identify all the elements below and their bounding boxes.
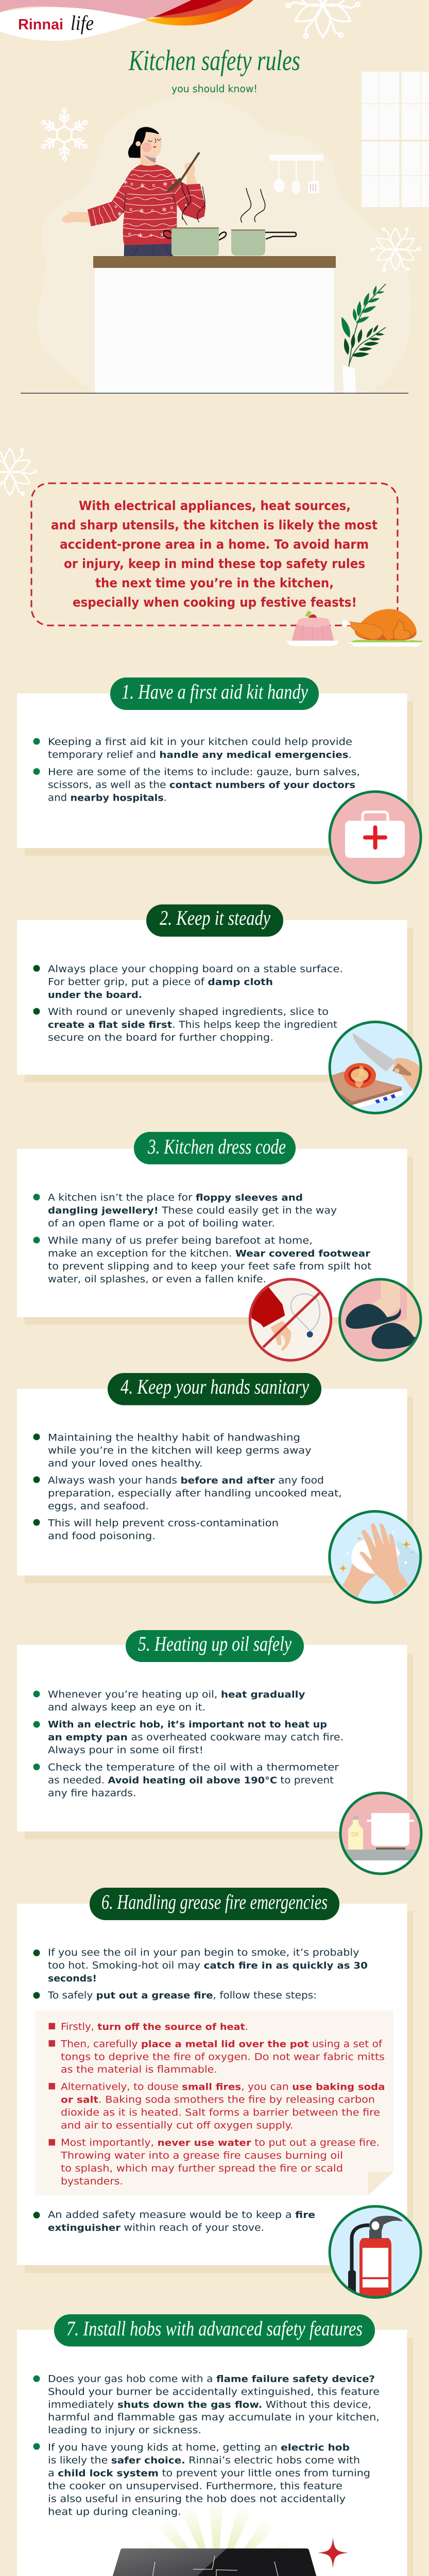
body text: and always keep an eye on it. (48, 1702, 205, 1713)
light leaves (339, 285, 385, 339)
intro text: accident-prone area in a home. To avoid harm (60, 537, 369, 552)
heading pill: 5. Heating up oil safely (138, 1632, 291, 1655)
steam from large pot (182, 183, 205, 225)
burner marks (121, 2556, 309, 2576)
body text (48, 964, 343, 1043)
body text: If you see the oil in your pan begin to smoke, it’s probably (48, 1947, 359, 1958)
body text: is also useful in ensuring the hob does not accidentally (48, 2494, 346, 2505)
card (17, 693, 407, 848)
card shadow (25, 928, 413, 1082)
body text: immediately shuts down the gas flow. Without this device, (48, 2400, 371, 2410)
body text: an empty pan as overheated cookware may catch fire. (48, 1732, 344, 1743)
stems (349, 284, 386, 367)
body text: make an exception for the kitchen. Wear covered footwear (48, 1248, 370, 1259)
steps text: Then, carefully place a metal lid over the pot using a set of (60, 2039, 383, 2049)
icon: knife and tomato (328, 1022, 421, 1113)
intro text: especially when cooking up festive feasts! (73, 595, 357, 610)
card (17, 1389, 407, 1575)
steps text: as the material is flammable. (61, 2064, 217, 2075)
body text: heat up during cleaning. (48, 2507, 181, 2517)
steps text: bystanders. (61, 2176, 123, 2187)
body text (48, 2374, 380, 2517)
intro text: and sharp utensils, the kitchen is likely the most (51, 517, 377, 533)
card (17, 1904, 407, 2265)
steps text: dioxide as it is heated. Salt forms a barrier between the fire (61, 2107, 380, 2119)
snowflake mid left (0, 448, 37, 496)
heading pill (146, 905, 283, 937)
face (141, 132, 162, 157)
plant in vase (339, 284, 386, 393)
body text: With round or unevenly shaped ingredients, slice to (48, 1007, 329, 1018)
subtitle: you should know! (171, 83, 258, 95)
steps text: Firstly, turn off the source of heat . (61, 2022, 248, 2032)
card (17, 2330, 407, 2576)
snowflake right (370, 228, 421, 271)
body text: temporary relief and handle any medical emergencies . (48, 750, 352, 760)
roast turkey on plate (342, 609, 424, 647)
body text: any fire hazards. (48, 1788, 136, 1799)
heading pill (134, 1132, 296, 1164)
card shadow (25, 1397, 413, 1583)
icon: first aid kit (330, 791, 421, 883)
body text: Does your gas hob come with a flame failure safety device? (48, 2374, 375, 2384)
body text: Maintaining the healthy habit of handwashing (48, 1432, 300, 1444)
card (17, 920, 407, 1075)
body text: Always place your chopping board on a stable surface. (48, 964, 343, 975)
steps text (60, 2022, 385, 2187)
heading pill: 2. Keep it steady (160, 906, 270, 929)
body text: too hot. Smoking-hot oil may catch fire in as quickly as 30 (48, 1960, 368, 1971)
body text: Whenever you’re heating up oil, heat gradually (48, 1689, 305, 1700)
steps note panel (35, 2010, 393, 2196)
card shadow (25, 1654, 413, 1839)
body text: Keeping a first aid kit in your kitchen could help provide (48, 737, 352, 748)
body text (47, 1947, 368, 2001)
body text: a child lock system to prevent your little ones from turning (48, 2468, 370, 2479)
closing text (48, 2210, 315, 2233)
dark leaves (342, 324, 384, 358)
folded corner (368, 2172, 393, 2196)
body text: and nearby hospitals . (48, 792, 167, 804)
section 3: kitchen dress code (17, 1132, 423, 1360)
intro text: or injury, keep in mind these top safety rules (64, 556, 365, 571)
steps text: tongs to deprive the fire of oxygen. Do not wear fabric mitts (61, 2052, 385, 2063)
body text: Always wash your hands before and after any food (48, 1476, 324, 1486)
card shadow (25, 2338, 413, 2576)
hair (128, 127, 159, 158)
red sparkles (59, 2537, 349, 2576)
gloss highlight (98, 2548, 227, 2576)
icon: covered footwear (340, 1279, 423, 1360)
utensil rack (269, 155, 323, 194)
section 2: keep it steady (17, 905, 421, 1113)
body text (48, 1192, 372, 1285)
body text: While many of us prefer being barefoot at home, (48, 1235, 313, 1246)
window (362, 72, 429, 207)
body text: while you’re in the kitchen will keep germs away (48, 1446, 312, 1456)
icon: fire extinguisher (330, 2206, 421, 2300)
section 1: first aid kit (17, 677, 421, 883)
card (17, 1645, 407, 1832)
body text: harmful and flammable gas may accumulate in your kitchen, (48, 2412, 380, 2423)
body text (48, 1689, 344, 1799)
snowflake left (40, 109, 89, 160)
section 6: handling grease fire emergencies (17, 1888, 421, 2300)
section 7: install hobs with advanced safety features (17, 2314, 413, 2576)
steps text: or salt . Baking soda smothers the fire by releasing carbon (61, 2095, 375, 2105)
neck (141, 152, 156, 166)
body text: create a flat side first . This helps keep the ingredient (48, 1020, 337, 1030)
right hand (184, 163, 197, 185)
small green pot (231, 230, 296, 256)
jelly dessert on plate (286, 611, 339, 646)
card shadow (25, 1157, 413, 1325)
pants (124, 243, 173, 256)
body text: With an electric hob, it’s important not to heat up (48, 1719, 327, 1730)
bullets (33, 738, 40, 775)
heading pill (110, 677, 319, 710)
floor line (21, 393, 408, 394)
bullets (33, 1691, 40, 1770)
logo: Rinnai life (18, 11, 94, 35)
heading pill (108, 1373, 321, 1405)
body text: water, oil splashes, or even a fallen knife. (48, 1274, 266, 1285)
woman cooking with wooden spoon (62, 127, 205, 256)
steps text: Alternatively, to douse small fires , you can use baking soda (61, 2081, 385, 2093)
icon: no floppy sleeves or jewellery (250, 1279, 331, 1360)
wooden spoon (180, 153, 199, 181)
body text: and your loved ones healthy. (48, 1458, 203, 1469)
body text: the cooker on unsupervised. Furthermore, this feature (48, 2481, 342, 2492)
heading pill: 4. Keep your hands sanitary (121, 1375, 309, 1398)
intro text (51, 498, 377, 610)
steps text: Most importantly, never use water to put out a grease fire. (61, 2138, 380, 2148)
body text: eggs, and seafood. (48, 1501, 149, 1512)
vase (342, 365, 356, 393)
body text: secure on the board for further chopping. (48, 1032, 273, 1043)
intro text: the next time you’re in the kitchen, (95, 575, 334, 590)
counter (93, 256, 336, 393)
bullets (33, 1194, 40, 1244)
left hand (62, 212, 90, 223)
card shadow (25, 1911, 413, 2273)
red square bullets (48, 2023, 55, 2145)
glow rays behind hob (138, 2501, 295, 2576)
body text: Here are some of the items to include: gauze, burn salves, (48, 767, 360, 778)
steps text: to splash, which may further spread the fire or scald (61, 2163, 343, 2174)
intro text: With electrical appliances, heat sources, (79, 498, 351, 513)
icon: oil bottle and pot on stove (340, 1793, 422, 1876)
sweater body and sleeves (88, 164, 205, 245)
card (17, 1149, 407, 1317)
logo: Rinnai life: life (71, 11, 94, 35)
section 5: heating up oil safely (17, 1630, 422, 1876)
body text: A kitchen isn’t the place for floppy sleeves and (48, 1192, 303, 1204)
heading pill: 6. Handling grease fire emergencies (101, 1890, 328, 1913)
body text: Check the temperature of the oil with a thermometer (48, 1762, 339, 1773)
large green pot (163, 228, 226, 256)
light blob behind kitchen scene (37, 96, 411, 393)
bullets (33, 1433, 40, 1526)
body text: Should your burner be accidentally extinguished, this feature (48, 2386, 380, 2398)
body text: preparation, especially after handling uncooked meat, (48, 1488, 342, 1499)
steps text: Throwing water into a grease fire causes burning oil (60, 2150, 343, 2161)
icon: oil bottle and pot on stove: Oil (351, 1832, 358, 1838)
body text: under the board. (48, 990, 142, 1001)
body text: seconds! (48, 1973, 97, 1984)
bullets (33, 965, 40, 1015)
body text: leading to injury or sickness. (48, 2425, 201, 2436)
heading pill (90, 1888, 339, 1920)
body text: For better grip, put a piece of damp cloth (48, 977, 273, 988)
snowflake top right (285, 0, 361, 38)
header swoosh banner (0, 0, 253, 41)
closing text: extinguisher within reach of your stove. (48, 2223, 264, 2233)
body text: and food poisoning. (48, 1531, 156, 1541)
body text: to prevent slipping and to keep your feet safe from spilt hot (48, 1261, 372, 1272)
heading pill (126, 1630, 304, 1662)
body text: This will help prevent cross-contamination (47, 1518, 279, 1529)
electric hob (98, 2548, 331, 2576)
heading pill: 1. Have a first aid kit handy (122, 680, 308, 703)
body text: Always pour in some oil first! (48, 1745, 203, 1756)
steam from small pot (241, 188, 265, 223)
heading pill (54, 2314, 375, 2346)
body text (48, 737, 360, 804)
bullets (33, 2375, 40, 2450)
heading pill: 7. Install hobs with advanced safety features (66, 2317, 363, 2340)
body text: If you have young kids at home, getting an electric hob (48, 2442, 350, 2453)
body text: scissors, as well as the contact numbers of your doctors (48, 780, 355, 790)
body text: dangling jewellery! These could easily get in the way (48, 1206, 337, 1216)
sweater stripes (93, 169, 204, 238)
main title: Kitchen safety rules (128, 45, 300, 77)
section 4: keep your hands sanitary (17, 1373, 421, 1602)
body text: as needed. Avoid heating oil above 190°C to prevent (48, 1775, 334, 1786)
intro dashed panel (31, 483, 398, 625)
logo: Rinnai life: Rinnai (18, 16, 63, 33)
closing text: An added safety measure would be to keep a fire (48, 2210, 315, 2221)
heading pill: 3. Kitchen dress code (147, 1135, 286, 1158)
card shadow (25, 701, 413, 856)
body text: To safely put out a grease fire , follow these steps: (47, 1990, 317, 2001)
body text: of an open flame or a pot of boiling water. (48, 1218, 275, 1229)
icon: washing hands (330, 1512, 421, 1602)
body text: is likely the safer choice. Rinnai’s electric hobs come with (48, 2455, 360, 2466)
steps text: and air to essentially cut off oxygen supply. (61, 2121, 294, 2131)
bullets (33, 1950, 40, 2218)
body text (47, 1432, 342, 1541)
